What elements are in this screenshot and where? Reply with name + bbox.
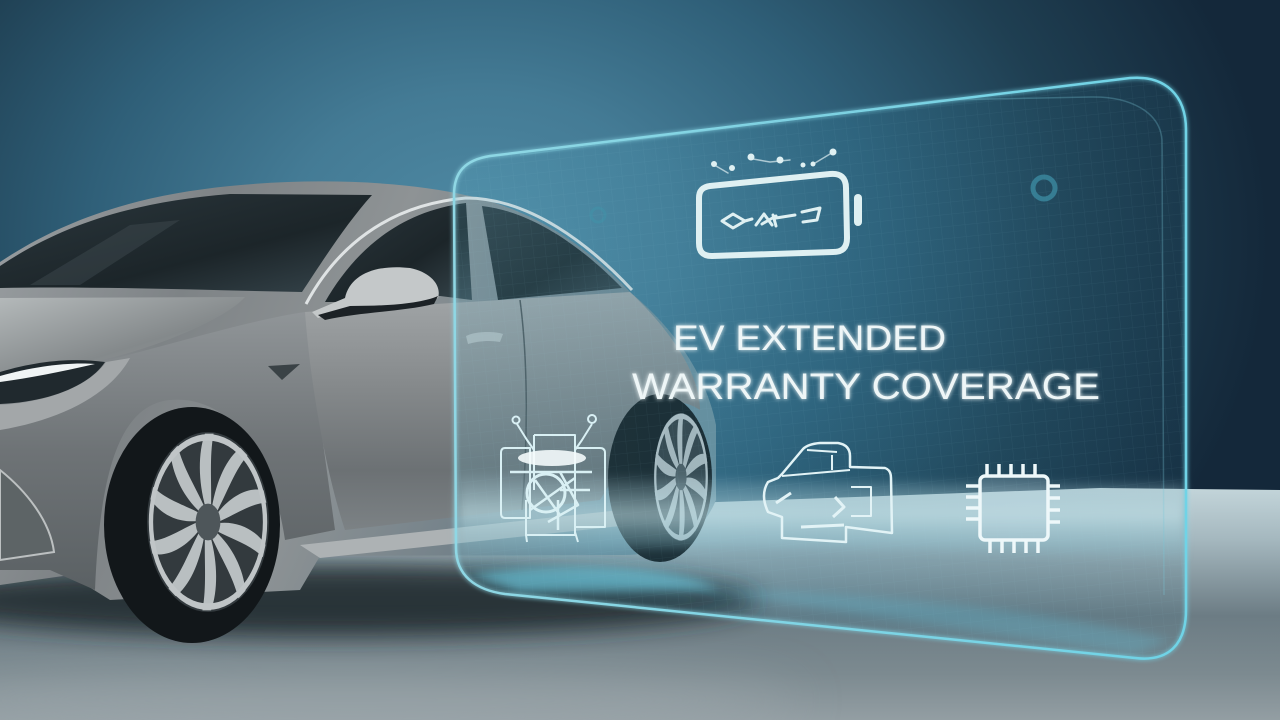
holographic panel xyxy=(454,78,1186,659)
badge accent xyxy=(268,364,300,380)
front fender xyxy=(0,312,335,590)
light band xyxy=(458,470,1184,560)
title xyxy=(632,319,1100,407)
hood xyxy=(0,297,245,372)
panel bottom glow xyxy=(470,567,720,592)
door panel xyxy=(305,292,700,530)
front bumper detail xyxy=(0,470,54,560)
car shadow xyxy=(0,564,760,636)
title: WARRANTY COVERAGE xyxy=(632,366,1100,407)
rear side window xyxy=(482,206,622,300)
windshield xyxy=(0,194,372,292)
lower sill xyxy=(300,510,620,558)
icon: chip xyxy=(966,464,1060,553)
front wheel xyxy=(104,407,280,643)
car body xyxy=(0,181,716,600)
door handle xyxy=(466,332,503,344)
window chrome xyxy=(306,198,632,304)
panel surface xyxy=(454,78,1186,659)
icon: battery xyxy=(699,148,858,256)
icon: engine xyxy=(764,443,892,542)
icon: electric motor xyxy=(501,415,605,542)
title: EV EXTENDED xyxy=(673,319,946,358)
panel border xyxy=(454,78,1186,659)
headlight xyxy=(0,360,105,404)
mirror xyxy=(312,267,439,318)
front side window xyxy=(325,203,472,302)
floor xyxy=(0,488,1280,720)
door seam xyxy=(520,300,526,510)
rear wheel xyxy=(608,394,712,562)
node dots xyxy=(591,177,1055,222)
car xyxy=(0,181,760,643)
